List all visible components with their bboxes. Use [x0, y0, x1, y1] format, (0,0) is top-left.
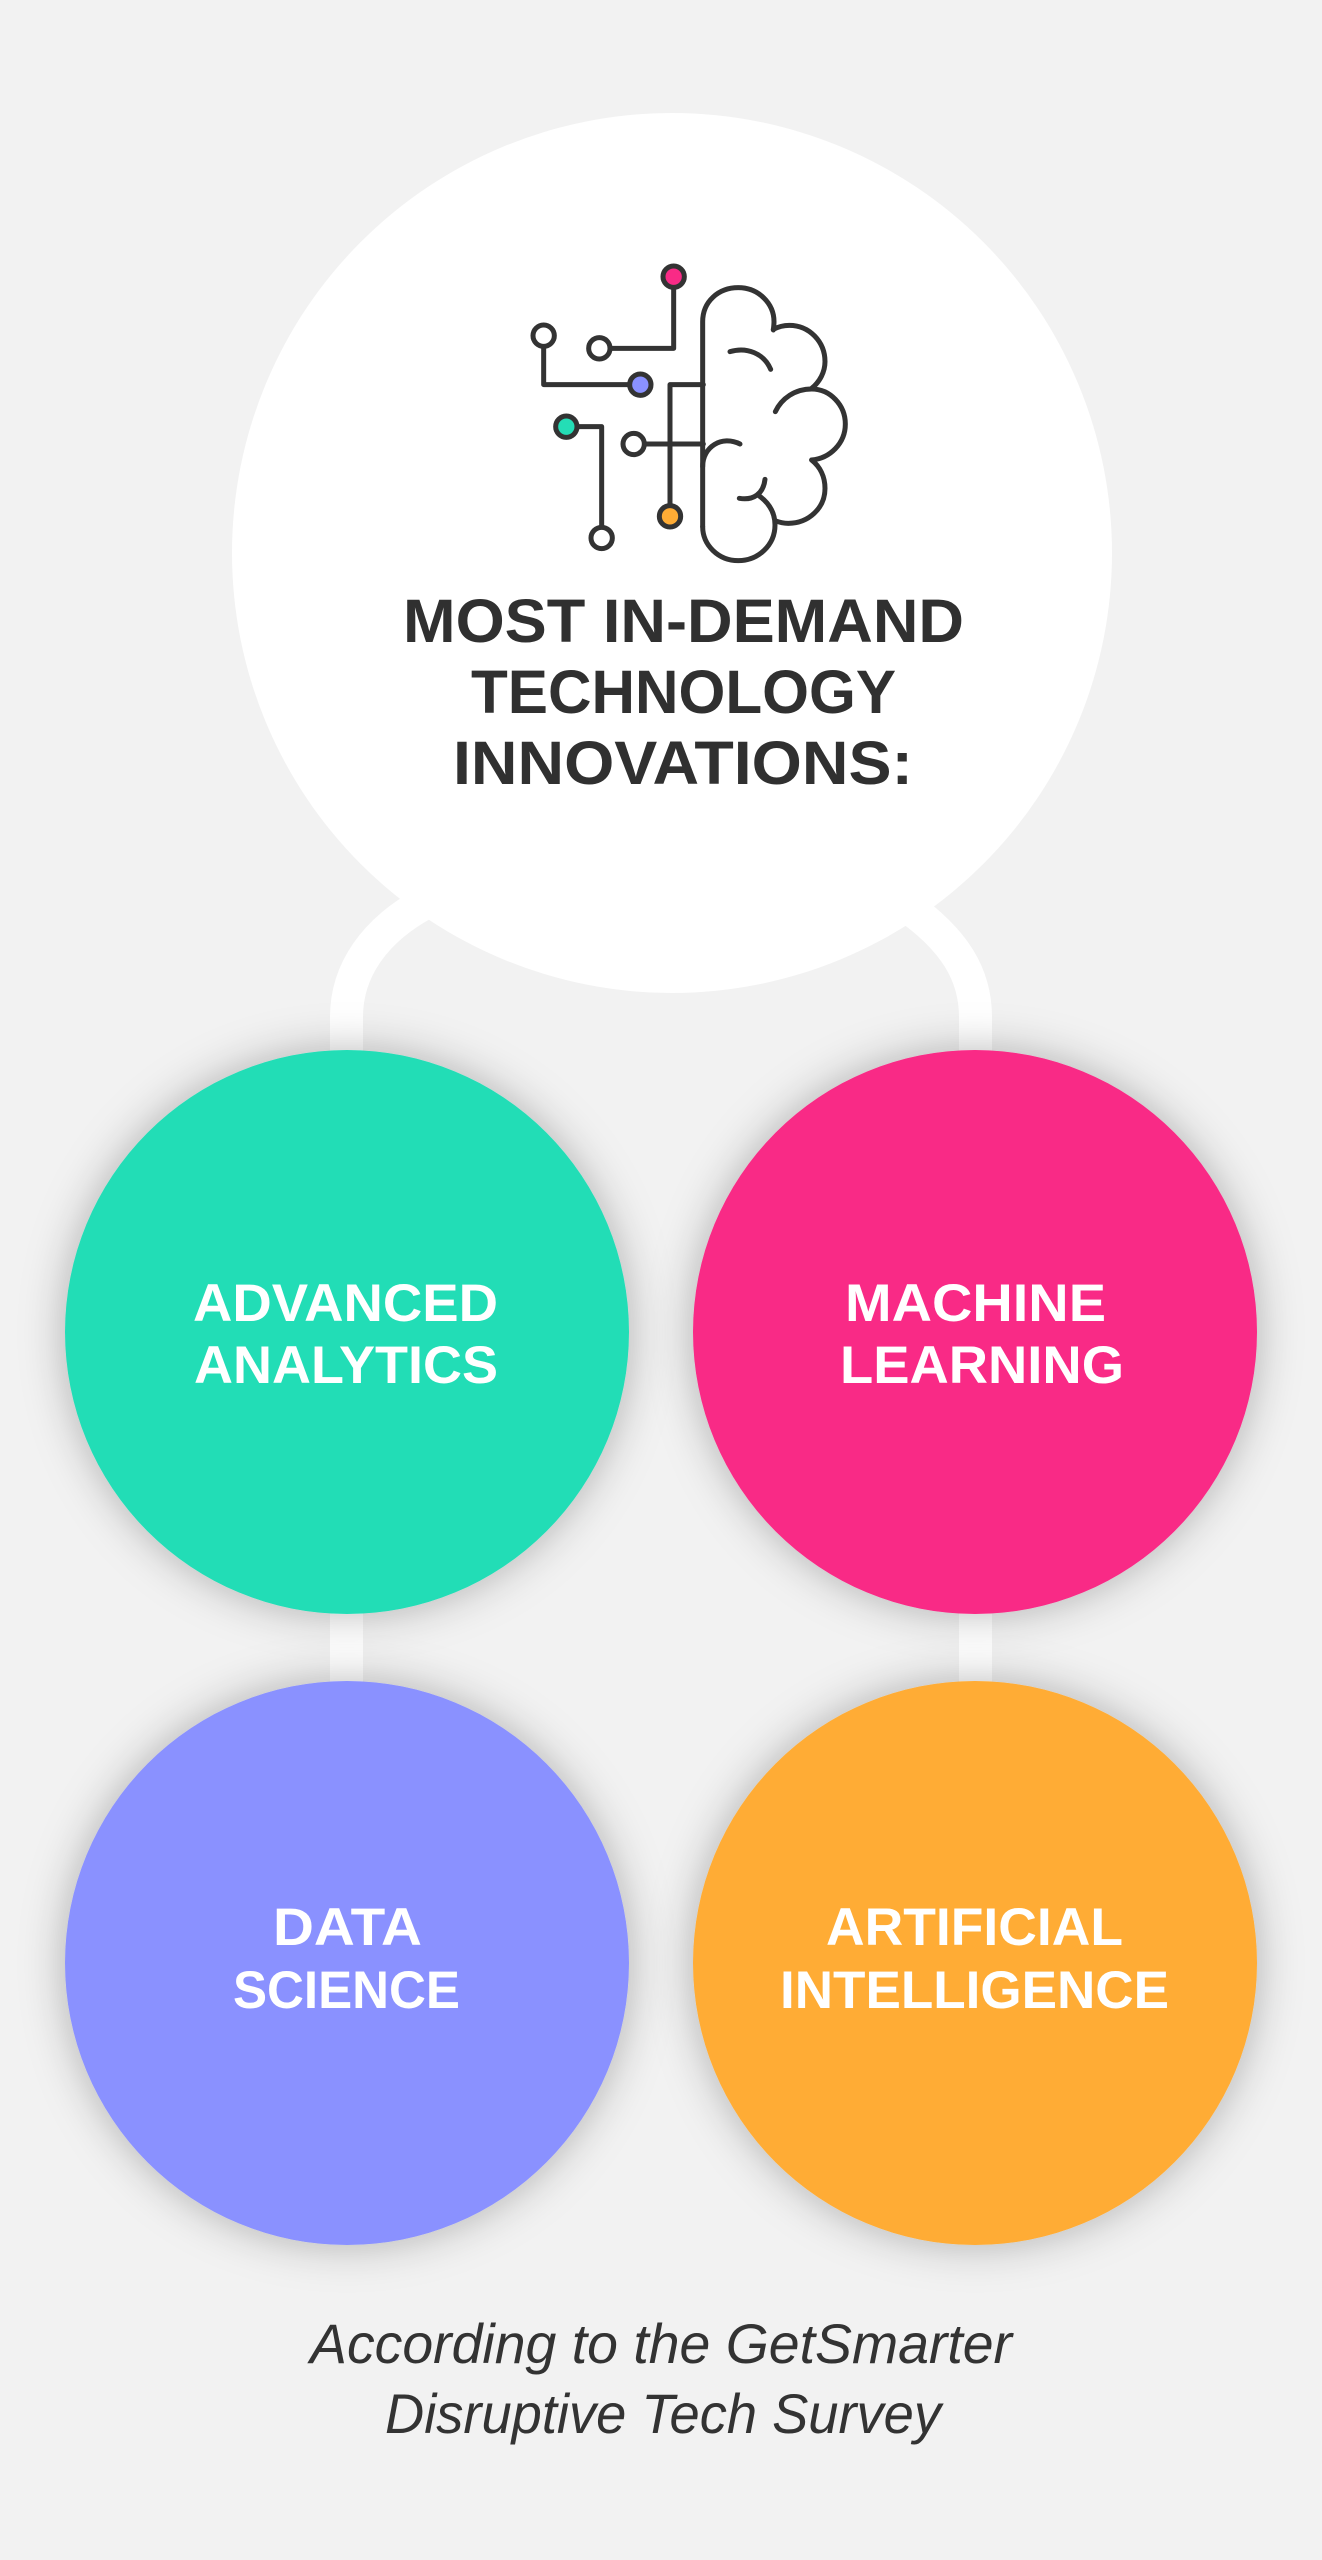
- label: advanced analytics: [193, 1274, 498, 1395]
- icon: brain circuit: [533, 266, 845, 561]
- label: advanced analytics: ANALYTICS: [194, 1336, 498, 1395]
- label: advanced analytics: ADVANCED: [193, 1274, 498, 1333]
- label: artificial intelligence: [780, 1898, 1169, 2020]
- source note: According to the GetSmarter: [307, 2312, 1014, 2375]
- panel: machine learning: [693, 1050, 1257, 1614]
- title: TECHNOLOGY: [471, 658, 896, 726]
- title: MOST IN-DEMAND: [403, 587, 964, 655]
- label: artificial intelligence: ARTIFICIAL: [826, 1898, 1123, 1957]
- connectors: [346, 903, 976, 1700]
- label: machine learning: LEARNING: [840, 1336, 1124, 1395]
- label: machine learning: MACHINE: [845, 1274, 1106, 1333]
- label: data science: DATA: [273, 1898, 422, 1957]
- label: machine learning: [840, 1274, 1124, 1395]
- panel: artificial intelligence: [693, 1681, 1257, 2245]
- panel: header circle: [232, 113, 1112, 993]
- label: artificial intelligence: INTELLIGENCE: [780, 1961, 1169, 2020]
- source note: [307, 2312, 1014, 2445]
- title: [403, 587, 964, 797]
- title: INNOVATIONS:: [453, 729, 913, 797]
- panel: data science: [65, 1681, 629, 2245]
- panel: advanced analytics: [65, 1050, 629, 1614]
- label: data science: SCIENCE: [233, 1961, 460, 2020]
- source note: Disruptive Tech Survey: [385, 2382, 944, 2445]
- label: data science: [233, 1898, 460, 2020]
